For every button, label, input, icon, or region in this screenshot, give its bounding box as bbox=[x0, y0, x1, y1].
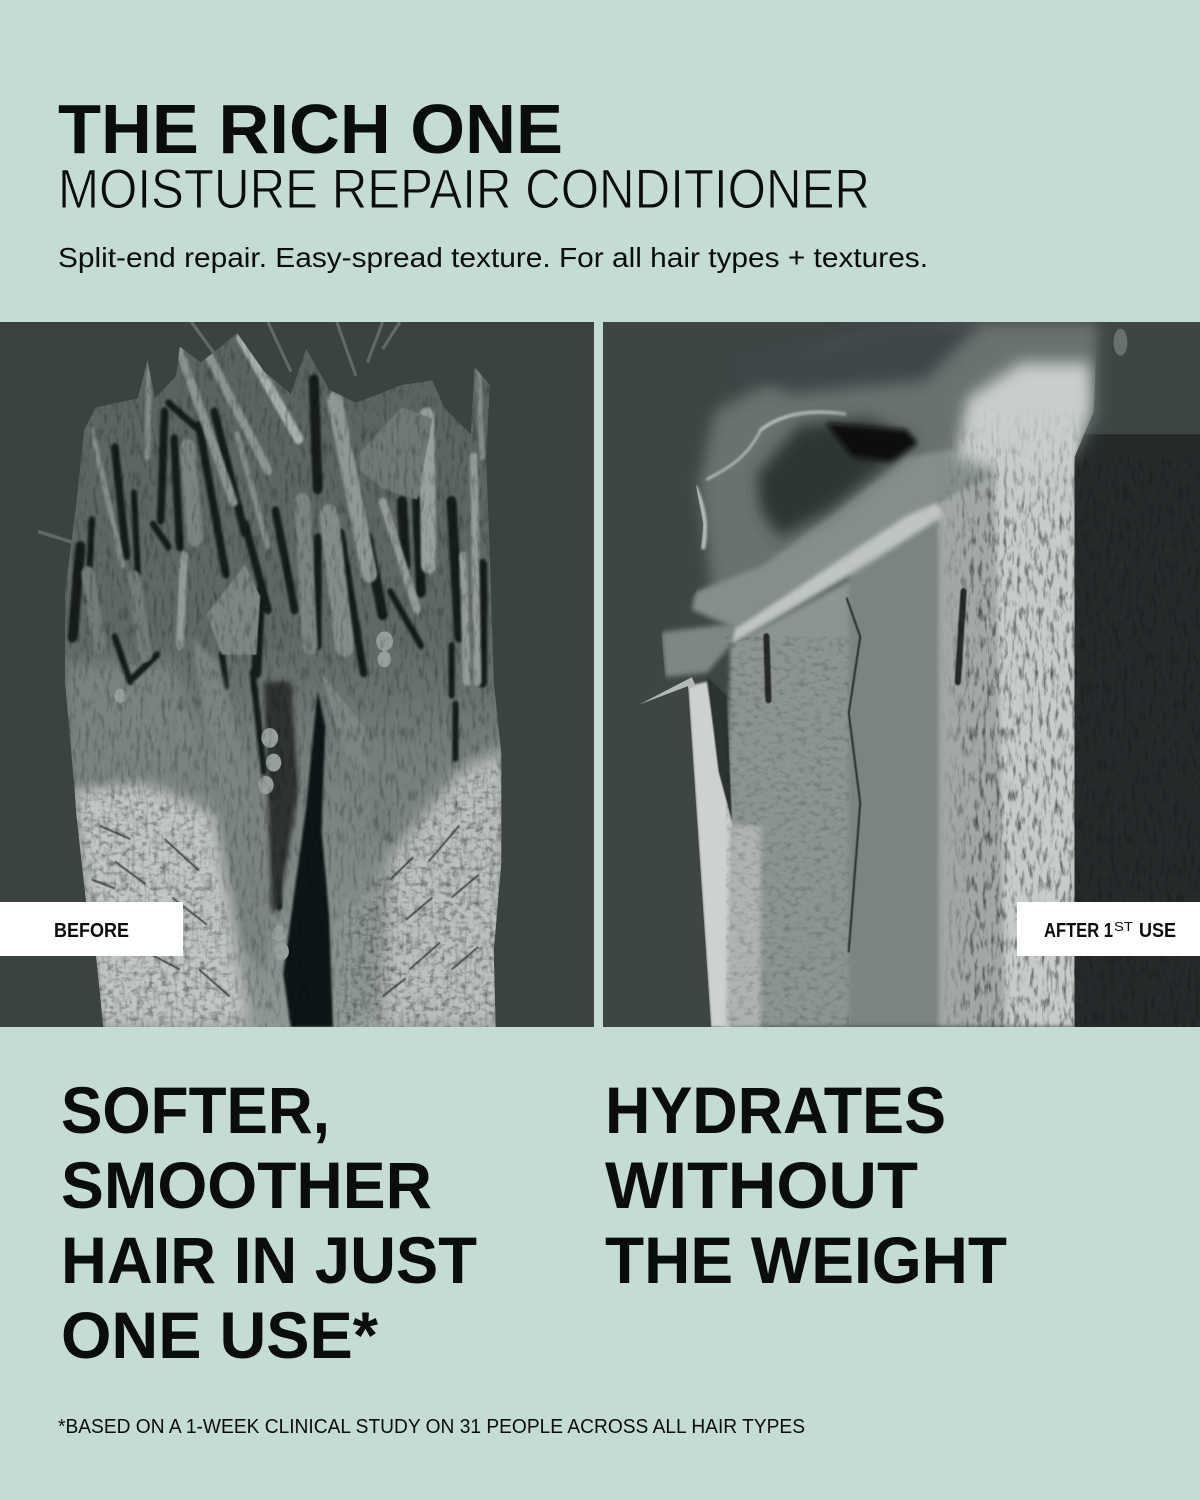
fractured band above the edge bbox=[692, 443, 994, 628]
claim: softer, smoother hair: HAIR IN JUST bbox=[61, 1223, 477, 1297]
bright left edge of strand bbox=[688, 682, 732, 1027]
cracks bbox=[92, 826, 478, 996]
cuticle texture bbox=[939, 403, 1084, 1027]
central split bbox=[283, 691, 333, 1027]
cuticle texture bbox=[76, 757, 502, 1027]
claim: hydrates without the weight: HYDRATES bbox=[605, 1073, 946, 1147]
lower right background texture bbox=[1075, 457, 1200, 1027]
strand texture bbox=[65, 336, 502, 1027]
bright band along the fractured edge bbox=[730, 502, 944, 646]
panel: before photo of damaged hair bbox=[0, 322, 594, 1027]
label: before bbox=[0, 902, 183, 956]
label: after first use: ST bbox=[1114, 919, 1133, 934]
claim: softer, smoother hair: SOFTER, bbox=[61, 1073, 330, 1147]
hollow bbox=[757, 419, 918, 538]
label: before: BEFORE bbox=[54, 920, 129, 942]
glowing rim lines bbox=[696, 412, 845, 547]
footnote: *BASED ON A 1-WEEK CLINICAL STUDY ON 31 PEOPLE ACROSS ALL HAIR TYPES bbox=[58, 1416, 805, 1438]
tagline: Split-end repair. Easy-spread texture. For all hair types + textures. bbox=[58, 242, 928, 273]
label: after first use: AFTER 1 bbox=[1044, 920, 1113, 942]
subtitle: MOISTURE REPAIR CONDITIONER bbox=[58, 157, 870, 220]
label: after first use bbox=[1017, 902, 1200, 956]
hazy top area bbox=[700, 322, 1098, 614]
flap and chunks of cuticle bbox=[360, 407, 432, 500]
frayed tip bbox=[640, 677, 696, 704]
claim: softer, smoother hair bbox=[61, 1073, 477, 1372]
crevices bbox=[766, 592, 964, 951]
light strand fragments bbox=[88, 338, 482, 682]
claim: softer, smoother hair: SMOOTHER bbox=[61, 1148, 432, 1222]
panel: after photo of smoothed hair bbox=[603, 322, 1200, 1028]
claim: hydrates without the weight: WITHOUT bbox=[605, 1148, 918, 1222]
dark gaps between split strands bbox=[73, 380, 482, 906]
claim: hydrates without the weight: THE WEIGHT bbox=[605, 1223, 1007, 1297]
bright cap at the top right bbox=[956, 362, 1092, 470]
light cuticle areas bbox=[73, 781, 249, 1027]
dark background right of strand bbox=[1075, 434, 1200, 1028]
claim: hydrates without the weight bbox=[605, 1073, 1007, 1297]
fine top fibres bbox=[38, 322, 400, 542]
title: THE RICH ONE bbox=[58, 90, 563, 168]
label: after first use: USE bbox=[1139, 920, 1176, 942]
beads of debris bbox=[114, 631, 393, 960]
hair body bbox=[722, 430, 1076, 1027]
claim: softer, smoother hair: ONE USE* bbox=[61, 1298, 378, 1372]
